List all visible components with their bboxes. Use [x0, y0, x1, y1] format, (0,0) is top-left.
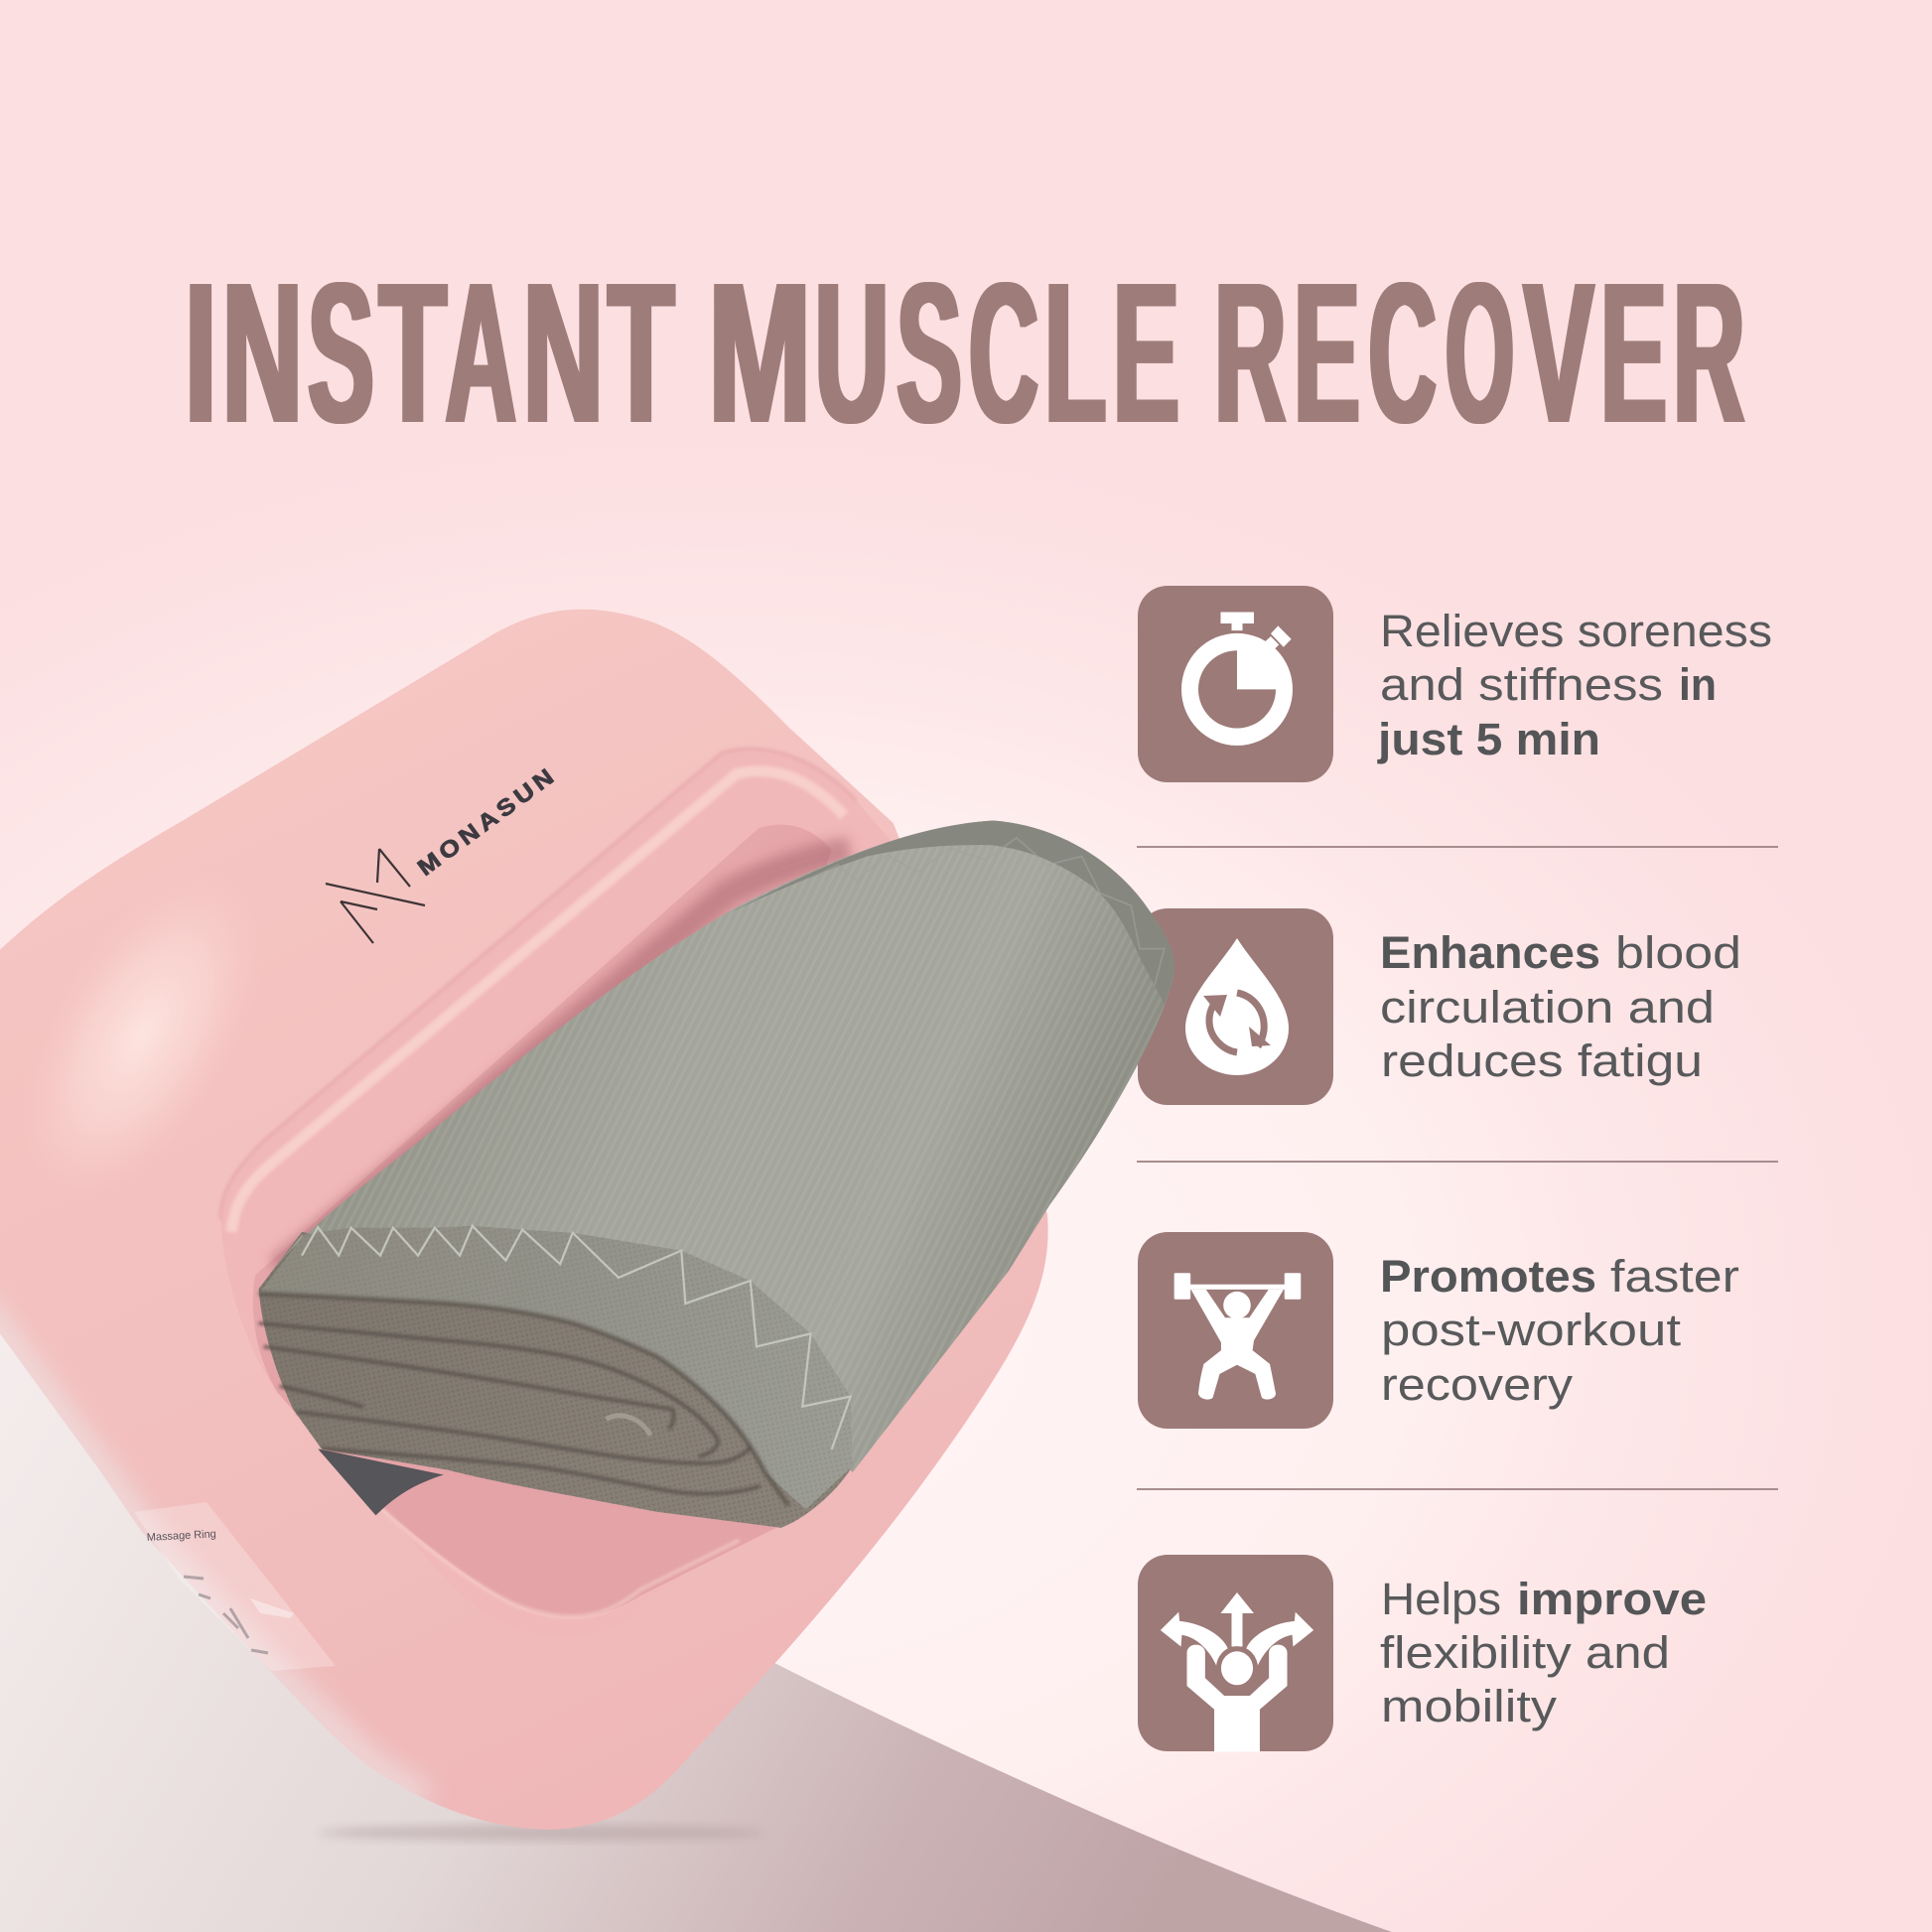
- text: circulation: circulation and: [1380, 982, 1715, 1033]
- title: O: [1446, 240, 1514, 465]
- feature 4: flexibility: [1138, 1555, 1707, 1751]
- text: flexibility: flexibility and: [1380, 1627, 1670, 1678]
- towel edge band: [727, 821, 1174, 1004]
- title: I: [185, 240, 216, 465]
- icon: blood drop: [1138, 908, 1333, 1105]
- title: V: [1523, 240, 1594, 465]
- brand logo: [326, 764, 559, 943]
- title: E: [1294, 240, 1360, 465]
- text: soreness: just 5 min: [1377, 714, 1600, 764]
- zigzag stitching: [302, 1226, 851, 1449]
- towel top surface: [259, 821, 1174, 1509]
- text: soreness: and stiffness: [1380, 659, 1663, 710]
- text: recovery: Promotes: [1380, 1251, 1596, 1302]
- text: recovery: post-workout: [1381, 1305, 1682, 1355]
- text: soreness: [1377, 606, 1772, 764]
- inner opening: [253, 825, 832, 1617]
- ring body: [0, 592, 1072, 1836]
- title: N: [523, 240, 604, 465]
- text: recovery: [1380, 1251, 1739, 1410]
- text: soreness: in: [1679, 659, 1717, 710]
- product: massage ring with towel: [0, 592, 1174, 1841]
- text: flexibility: mobility: [1381, 1681, 1558, 1731]
- title: M: [708, 240, 811, 465]
- title: E: [1113, 240, 1179, 465]
- feature 1: soreness: [1138, 586, 1772, 782]
- title: E: [1600, 240, 1667, 465]
- text: circulation: [1380, 927, 1741, 1086]
- text: circulation: blood: [1615, 927, 1741, 978]
- title: C: [1369, 240, 1437, 465]
- product label sticker: [134, 1502, 336, 1671]
- title: S: [897, 240, 962, 465]
- feature 2: circulation: [1138, 908, 1741, 1105]
- feature 3: recovery: [1138, 1232, 1739, 1429]
- title: U: [815, 240, 889, 465]
- towel shadow on opening: [277, 850, 850, 1269]
- title: L: [1044, 240, 1106, 465]
- text: R: [1673, 240, 1745, 465]
- text: soreness: Relieves soreness: [1380, 606, 1772, 656]
- title: A: [445, 240, 516, 465]
- title: N: [222, 240, 303, 465]
- text: flexibility: improve: [1517, 1574, 1707, 1624]
- brand logo: MONASUN: [413, 764, 559, 881]
- title: R: [1214, 240, 1287, 465]
- text: circulation: Enhances: [1380, 927, 1600, 978]
- title: T: [608, 240, 674, 465]
- raised rim: [220, 752, 892, 1312]
- interior dark gap: [318, 1449, 444, 1515]
- icon: weightlifter: [1138, 1232, 1333, 1429]
- text: flexibility: [1380, 1574, 1707, 1731]
- product shadow: [318, 1825, 764, 1841]
- icon: stopwatch: [1138, 586, 1333, 782]
- text: recovery: faster: [1610, 1251, 1739, 1302]
- text: recovery: recovery: [1381, 1359, 1574, 1410]
- product label sticker: Massage Ring: [147, 1528, 216, 1544]
- title: S: [308, 240, 374, 465]
- towel folds: [259, 1232, 853, 1528]
- divider lines: [1137, 846, 1778, 1490]
- icon: person with arrows: [1138, 1555, 1333, 1751]
- text: flexibility: Helps: [1381, 1574, 1501, 1624]
- title: T: [379, 240, 447, 465]
- title: [185, 240, 1745, 465]
- title: C: [969, 240, 1038, 465]
- stitched band: [259, 1226, 853, 1509]
- text: circulation: reduces fatigu: [1381, 1035, 1703, 1086]
